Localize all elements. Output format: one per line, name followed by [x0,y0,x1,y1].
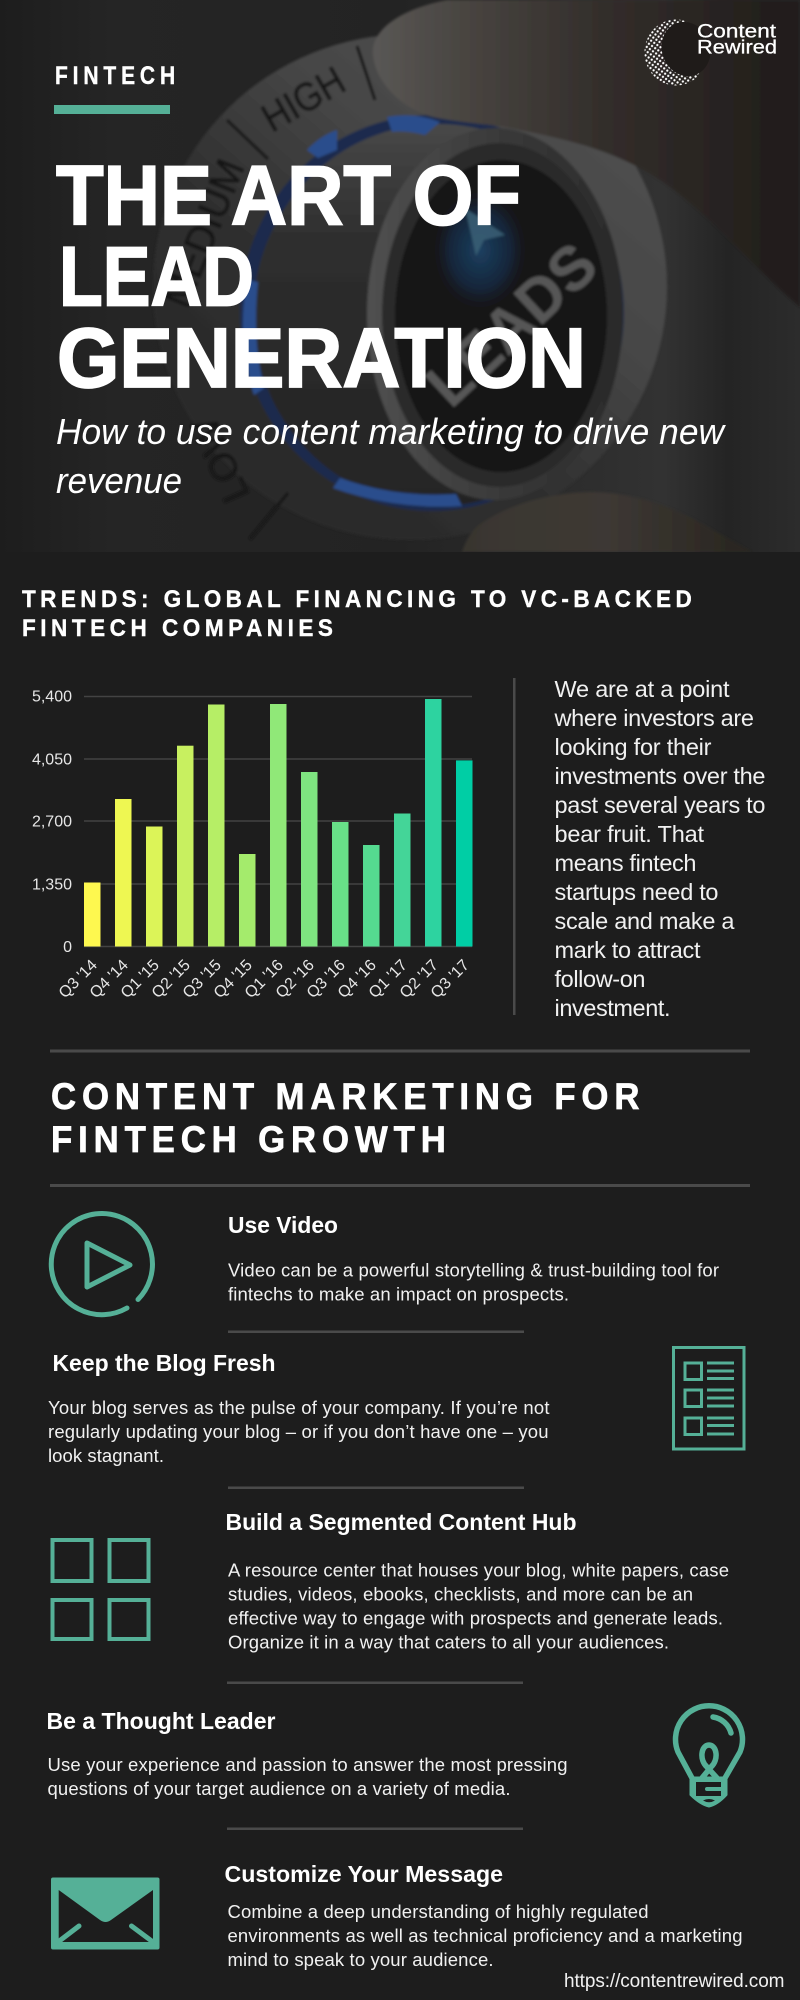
eyebrow: FINTECH: FINTECH [55,61,175,89]
title: LEAD [59,230,254,324]
heading: content marketing [51,1076,640,1160]
heading and copy: fintechs to make an impact on prospects. [228,1284,569,1304]
hero photo: hand turning a LEADS dial [152,0,800,552]
heading and copy: look stagnant. [48,1445,164,1466]
hero photo: hand turning a LEADS dial: HIGH [254,59,353,141]
hero photo: hand turning a LEADS dial: LOW [184,411,258,508]
heading and copy: Be a Thought Leader [46,1708,276,1734]
logo: Content Rewired: Rewired [697,38,777,58]
heading and copy: Keep the Blog Fresh [52,1350,276,1376]
text block: investors [554,676,766,1021]
item: thought leader [46,1706,742,1807]
heading and copy: Use your experience and passion to answer the most pressing [48,1754,568,1775]
x axis labels: Q3 '14 [56,957,101,1002]
bars [84,699,472,946]
hero photo: hand turning a LEADS dial: MEDIUM [155,153,253,313]
subtitle [56,411,726,501]
heading: content marketing: FINTECH GROWTH [51,1119,446,1160]
x axis labels: Q2 '17 [397,957,442,1002]
heading and copy: Combine a deep understanding of highly regulated [228,1901,648,1922]
fingers [373,0,800,307]
heading and copy: A resource center that houses your blog, white papers, case [228,1560,729,1580]
heading and copy [228,1212,719,1304]
heading and copy: mind to speak to your audience. [228,1949,494,1970]
heading and copy: questions of your target audience on a variety of media. [48,1778,510,1799]
text block: investors: looking for their [554,734,712,760]
website url: https://contentrewired.com [564,1971,784,1992]
bar chart: financing by quarter [32,688,473,1002]
heading and copy: effective way to engage with prospects and generate leads. [228,1608,723,1628]
item: use video [51,1212,719,1315]
text block: investors: means fintech [554,850,696,876]
heading and copy: Customize Your Message [224,1861,503,1887]
x axis labels [56,957,473,1002]
y axis labels: 1,350 [32,876,72,894]
heading and copy: Organize it in a way that caters to all your audiences. [228,1632,669,1652]
x axis labels: Q4 '15 [211,957,256,1002]
heading: trends: TRENDS: GLOBAL FINANCING TO VC-BACKED [22,585,692,612]
heading and copy: regularly updating your blog – or if you don’t have one – you [48,1421,548,1442]
x axis labels: Q3 '15 [180,957,225,1002]
item: segmented content hub [52,1509,729,1652]
x axis labels: Q1 '15 [118,957,163,1002]
text block: investors: where investors are [554,705,754,731]
logo: Content Rewired: Content [697,22,777,42]
heading and copy: studies, videos, ebooks, checklists, and more can be an [228,1584,693,1604]
heading and copy [46,1708,568,1799]
y axis labels: 0 [63,939,72,956]
heading: trends: FINTECH COMPANIES [22,614,333,641]
text block: investors: follow-on [554,966,646,992]
text block: investors: scale and make a [554,908,735,934]
heading: content marketing: CONTENT MARKETING FOR [51,1076,640,1117]
x axis labels: Q3 '17 [428,957,473,1002]
x axis labels: Q1 '16 [242,957,287,1002]
heading: trends [22,585,692,641]
logo: Content Rewired [644,15,777,86]
icon: envelope [51,1878,160,1950]
x axis labels: Q4 '16 [335,957,380,1002]
y axis labels: 2,700 [32,814,72,830]
x axis labels: Q2 '16 [273,957,318,1002]
title [56,148,586,405]
heading and copy: Build a Segmented Content Hub [226,1509,576,1535]
y axis labels [32,688,72,956]
hero photo: hand turning a LEADS dial: LEADS [414,230,611,420]
heading and copy [48,1350,550,1466]
text block: investors: mark to attract [554,937,701,963]
subtitle: How to use content marketing to drive new [56,411,726,452]
item: keep the blog fresh [48,1348,744,1466]
y axis labels: 4,050 [32,752,72,768]
teal accent bar [54,105,170,114]
title: THE ART OF [56,148,521,242]
x axis labels: Q1 '17 [366,957,411,1002]
text block: investors: startups need to [554,879,718,905]
text block: investors: past several years to [554,792,766,818]
heading and copy: Use Video [228,1212,338,1238]
x axis labels: Q2 '15 [149,957,194,1002]
text block: investors: We are at a point [554,676,730,702]
heading and copy: Video can be a powerful storytelling & trust-building tool for [228,1260,719,1280]
icon: play in circle [51,1213,152,1315]
item: customize your message [51,1861,742,1970]
title: GENERATION [57,311,586,405]
text block: investors: investments over the [554,763,766,789]
x axis labels: Q4 '14 [87,957,132,1002]
heading and copy [224,1861,742,1970]
y axis labels: 5,400 [32,688,72,706]
icon: document list [674,1348,744,1449]
heading and copy [226,1509,729,1652]
icon: light bulb [676,1706,742,1807]
text block: investors: investment. [554,995,670,1021]
subtitle: revenue [56,460,182,501]
icon: four squares [52,1540,148,1639]
heading and copy: environments as well as technical proficiency and a marketing [228,1925,742,1946]
x axis labels: Q3 '16 [304,957,349,1002]
text block: investors: bear fruit. That [554,821,704,847]
heading and copy: Your blog serves as the pulse of your company. If you’re not [48,1397,550,1418]
